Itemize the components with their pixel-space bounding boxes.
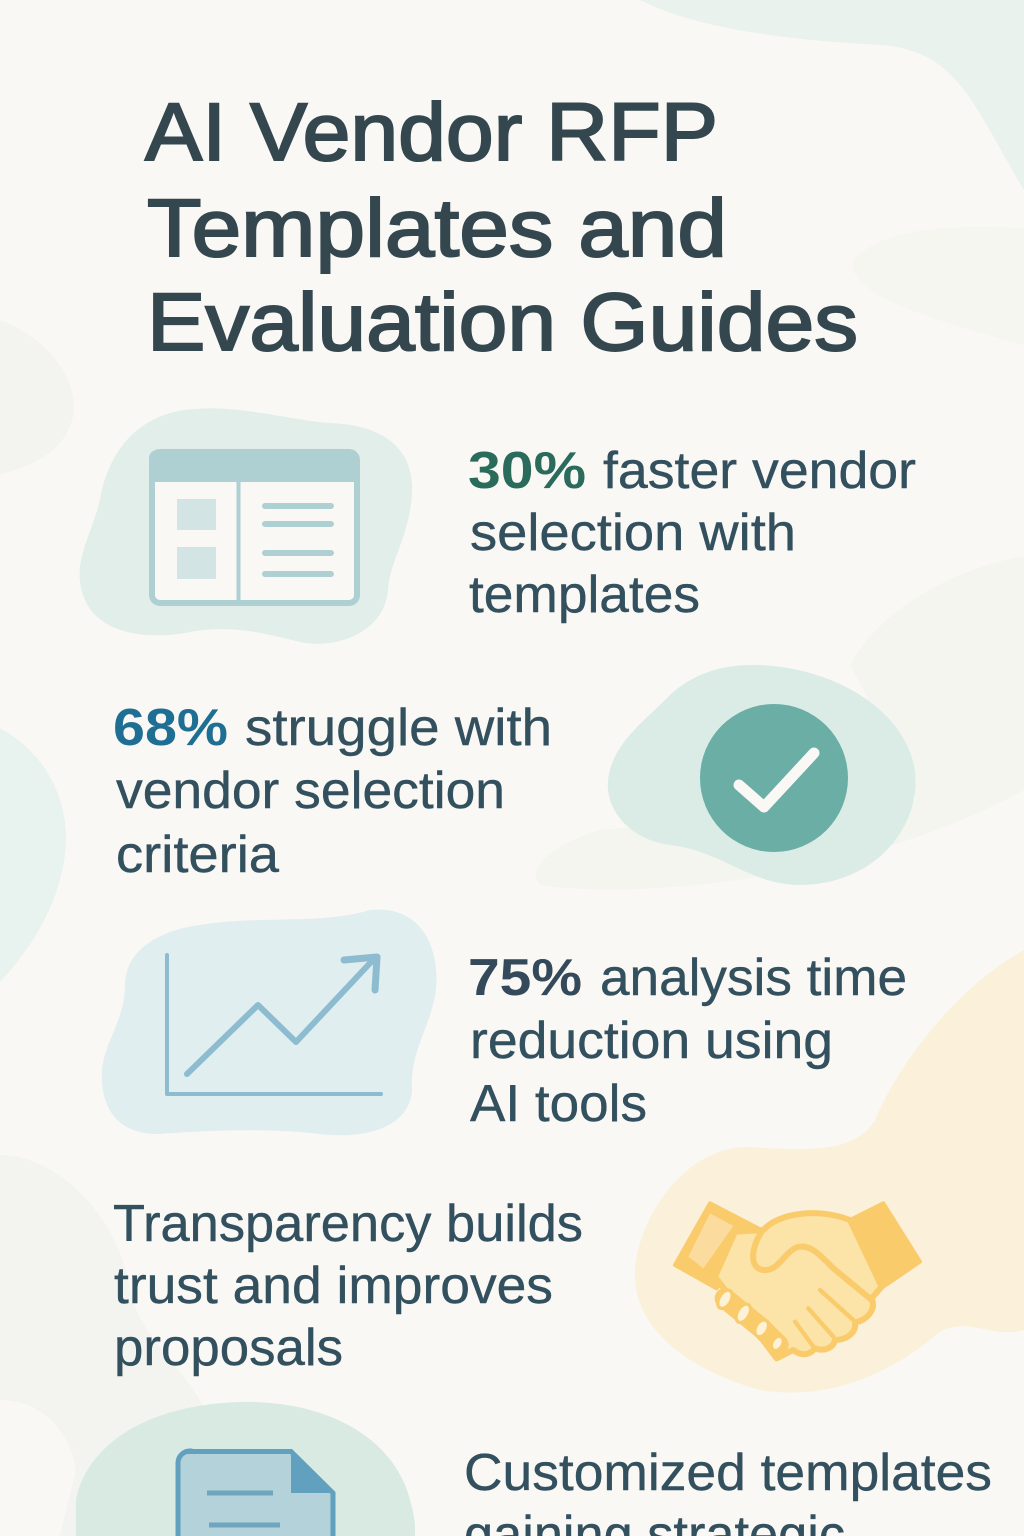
icon: template window bbox=[80, 408, 412, 644]
text: transparency: trust and improves bbox=[114, 1257, 553, 1315]
icon: handshake bbox=[635, 950, 1024, 1393]
stat text: 68%: struggle with bbox=[245, 699, 552, 757]
icon: growth chart bbox=[102, 910, 436, 1135]
stat text: 30%: selection with bbox=[470, 504, 796, 562]
panel: vendor selection speed bbox=[80, 408, 916, 644]
panel: transparency and trust bbox=[113, 950, 1024, 1393]
panel: customized templates bbox=[76, 1402, 992, 1536]
text: transparency: proposals bbox=[114, 1319, 343, 1377]
stat text: 75%: AI tools bbox=[470, 1075, 647, 1133]
stat text: 68%: criteria bbox=[116, 826, 279, 884]
text: customized templates bbox=[464, 1444, 992, 1536]
stat text: 30%: faster vendor bbox=[603, 442, 916, 500]
stat text: 75%: analysis time bbox=[600, 949, 907, 1007]
title: Templates and bbox=[147, 183, 727, 274]
stat text: 68%: 68% bbox=[113, 699, 228, 757]
stat text: 68%: vendor selection bbox=[116, 762, 505, 820]
stat text: 30%: templates bbox=[469, 566, 700, 624]
title: Evaluation Guides bbox=[147, 277, 858, 368]
icon: document bbox=[76, 1402, 415, 1536]
stat text: 75% bbox=[468, 949, 907, 1133]
stat text: 30%: 30% bbox=[468, 442, 586, 500]
title: AI Vendor RFP bbox=[145, 87, 718, 178]
icon: check mark bbox=[608, 665, 916, 885]
text: transparency: Transparency builds bbox=[113, 1195, 583, 1253]
stat text: 75%: 75% bbox=[468, 949, 582, 1007]
text: transparency bbox=[113, 1195, 583, 1377]
panel: analysis time reduction bbox=[102, 910, 907, 1135]
stat text: 30% bbox=[468, 442, 916, 624]
stat text: 75%: reduction using bbox=[470, 1012, 833, 1070]
text: customized templates: Customized templates bbox=[464, 1444, 992, 1502]
panel: selection criteria struggle bbox=[113, 665, 916, 885]
title bbox=[145, 87, 858, 368]
stat text: 68% bbox=[113, 699, 552, 884]
